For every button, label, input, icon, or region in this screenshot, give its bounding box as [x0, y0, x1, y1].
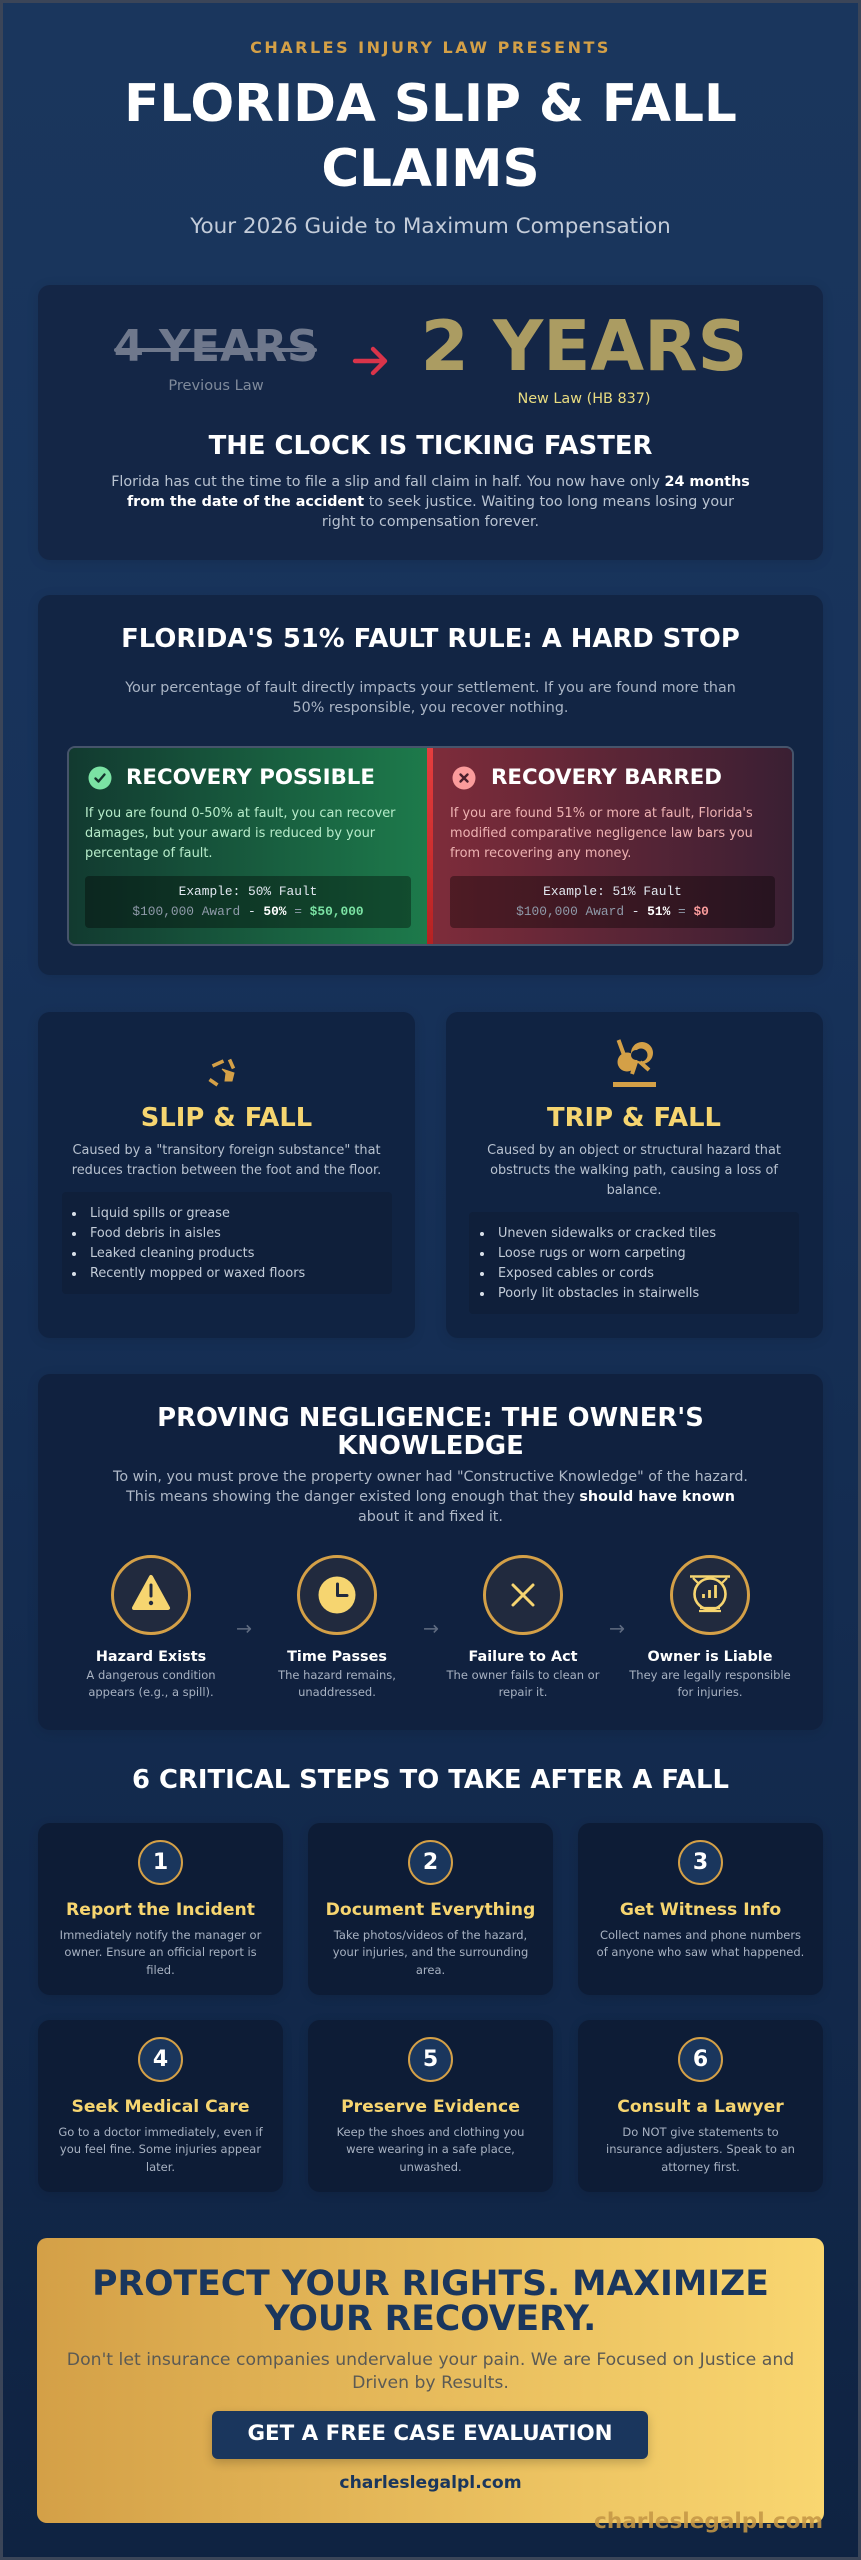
panel: slip and fall: [38, 1012, 415, 1338]
step card 5: [308, 2020, 553, 2192]
arrow: →: [236, 1617, 252, 1640]
description: [278, 1668, 396, 1699]
list items: Exposed cables or cords: [498, 1266, 654, 1281]
number: 1: [153, 1850, 168, 1875]
description: The owner fails to clean or: [447, 1668, 599, 1682]
panel heading: THE CLOCK IS TICKING FASTER: [209, 431, 652, 461]
description: [86, 1668, 216, 1699]
description: They are legally responsible: [629, 1668, 791, 1682]
step circle: liable: [670, 1555, 750, 1635]
icon: slip pieces: [208, 1058, 236, 1086]
arrow: red: [352, 346, 388, 376]
step text: [337, 2125, 524, 2174]
step card 1: [38, 1823, 283, 1995]
trip text: obstructs the walking path, causing a loss of: [490, 1163, 778, 1178]
number: [408, 1840, 453, 1885]
example: 51% fault: [450, 876, 775, 928]
cta heading: YOUR RECOVERY.: [265, 2299, 596, 2339]
section heading: steps: 6 CRITICAL STEPS TO TAKE AFTER A FALL: [132, 1764, 729, 1794]
step text: insurance adjusters. Speak to an: [606, 2142, 795, 2156]
step card 4: [38, 2020, 283, 2192]
step text: unwashed.: [399, 2160, 462, 2174]
description: appears (e.g., a spill).: [88, 1685, 214, 1699]
panel: trip and fall: [446, 1012, 823, 1338]
description: A dangerous condition: [86, 1668, 216, 1682]
negligence text: [112, 1469, 748, 1525]
step card 3: [578, 1823, 823, 1995]
example: 51% fault: Example: 51% Fault: [543, 884, 682, 899]
header eyebrow: CHARLES INJURY LAW PRESENTS: [250, 38, 611, 57]
negligence heading: [157, 1403, 704, 1461]
panel text: [111, 474, 750, 530]
trip text: balance.: [607, 1183, 661, 1198]
recovery barred text: [450, 806, 753, 861]
title: CLAIMS: [321, 139, 540, 199]
cta heading: PROTECT YOUR RIGHTS. MAXIMIZE: [92, 2264, 769, 2304]
number: [678, 2037, 723, 2082]
description: for injuries.: [677, 1685, 743, 1699]
label: Hazard Exists: [96, 1649, 206, 1665]
negligence text: about it and fixed it.: [358, 1509, 503, 1525]
list items: Leaked cleaning products: [90, 1246, 254, 1261]
example: 50% fault: $100,000 Award - 50% = $50,000: [132, 904, 364, 919]
icon: check: [88, 766, 112, 790]
label: Time Passes: [287, 1649, 387, 1665]
recovery possible text: percentage of fault.: [85, 846, 212, 861]
step label: liable: [629, 1649, 791, 1699]
panel: deadline: [38, 285, 823, 560]
step text: Immediately notify the manager or: [60, 1928, 261, 1942]
step text: Collect names and phone numbers: [600, 1928, 801, 1942]
step text: [60, 1928, 262, 1977]
step text: Do NOT give statements to: [622, 2125, 779, 2139]
description: [446, 1668, 600, 1699]
step circle: failure: [483, 1555, 563, 1635]
arrow: →: [423, 1617, 439, 1640]
step text: your injuries, and the surrounding: [333, 1945, 528, 1959]
step text: later.: [146, 2160, 175, 2174]
cta text: Driven by Results.: [352, 2373, 509, 2393]
step text: Go to a doctor immediately, even if: [58, 2125, 263, 2139]
list items: Liquid spills or grease: [90, 1206, 230, 1221]
description: [629, 1668, 791, 1699]
slip text: reduces traction between the foot and the floor.: [72, 1163, 381, 1178]
fault rule text: Your percentage of fault directly impacts your settlement. If you are found more than: [125, 680, 736, 696]
fault rule text: 50% responsible, you recover nothing.: [293, 700, 568, 716]
step text: Keep the shoes and clothing you: [337, 2125, 524, 2139]
step title: Document Everything: [326, 1900, 535, 1920]
watermark: charleslegalpl.com: [594, 2509, 823, 2534]
slip heading: SLIP & FALL: [141, 1103, 312, 1133]
step title: Get Witness Info: [620, 1900, 781, 1920]
label: Failure to Act: [468, 1649, 578, 1665]
recovery possible heading: RECOVERY POSSIBLE: [126, 765, 375, 790]
step circle: time: [297, 1555, 377, 1635]
trip text: [487, 1143, 781, 1198]
icon: cross: [511, 1583, 535, 1607]
step label: time: [278, 1649, 396, 1699]
trip list: [469, 1212, 799, 1314]
fault rule text: [125, 680, 736, 716]
divider: [427, 748, 433, 944]
list items: [90, 1206, 305, 1281]
icon: x: [452, 766, 476, 790]
green side: [69, 748, 427, 944]
step text: [597, 1928, 804, 1959]
number: 2: [423, 1850, 438, 1875]
new law label: New Law (HB 837): [517, 391, 651, 407]
step text: of anyone who saw what happened.: [597, 1945, 804, 1959]
number: [138, 2037, 183, 2082]
panel text: from the date of the accident to seek justice. Waiting too long means losing your: [127, 494, 734, 510]
step text: owner. Ensure an official report is: [64, 1945, 257, 1959]
panel: call to action: [37, 2238, 824, 2523]
red side: [433, 748, 792, 944]
example: 50% fault: Example: 50% Fault: [179, 884, 317, 899]
label: Owner is Liable: [648, 1649, 772, 1665]
recovery possible text: damages, but your award is reduced by your: [85, 826, 375, 841]
description: unaddressed.: [298, 1685, 376, 1699]
step label: failure: [446, 1649, 600, 1699]
icon: warning: [132, 1574, 170, 1610]
cta heading: [92, 2264, 769, 2339]
step circle: hazard: [111, 1555, 191, 1635]
step card 6: [578, 2020, 823, 2192]
website: charleslegalpl.com: [339, 2473, 522, 2493]
fault rule heading: FLORIDA'S 51% FAULT RULE: A HARD STOP: [121, 624, 740, 654]
cta button: GET A FREE CASE EVALUATION: [247, 2421, 613, 2446]
negligence text: To win, you must prove the property owner had "Constructive Knowledge" of the hazard.: [113, 1469, 748, 1485]
recovery barred text: modified comparative negligence law bars you: [450, 826, 753, 841]
number: 6: [693, 2047, 708, 2072]
slip text: Caused by a "transitory foreign substance" that: [72, 1143, 381, 1158]
step text: area.: [416, 1963, 445, 1977]
old deadline 4 years: 4 YEARS: [114, 322, 318, 372]
icon: liable chart: [690, 1575, 730, 1612]
step title: Report the Incident: [66, 1900, 255, 1920]
panel text: Florida has cut the time to file a slip and fall claim in half. You now have only 24 months: [111, 474, 750, 490]
number: 3: [693, 1850, 708, 1875]
step text: filed.: [146, 1963, 175, 1977]
recovery barred heading: RECOVERY BARRED: [491, 765, 722, 790]
number: 4: [153, 2047, 168, 2072]
title: FLORIDA SLIP & FALL: [124, 74, 737, 134]
example: 50% fault: [85, 876, 411, 928]
cta text: [67, 2350, 794, 2393]
description: The hazard remains,: [278, 1668, 396, 1682]
slip list: [62, 1192, 392, 1294]
recovery possible text: If you are found 0-50% at fault, you can recover: [85, 806, 396, 821]
title: [124, 74, 737, 199]
list items: Recently mopped or waxed floors: [90, 1266, 305, 1281]
icon: trip figure: [613, 1039, 656, 1087]
step text: Take photos/videos of the hazard,: [334, 1928, 527, 1942]
list items: Poorly lit obstacles in stairwells: [498, 1286, 699, 1301]
cta text: Don't let insurance companies undervalue your pain. We are Focused on Justice and: [67, 2350, 794, 2370]
panel: negligence: [38, 1374, 823, 1730]
step title: Seek Medical Care: [71, 2097, 250, 2117]
icon: clock: [318, 1576, 356, 1614]
step text: were wearing in a safe place,: [346, 2142, 515, 2156]
recovery barred text: from recovering any money.: [450, 846, 631, 861]
number: [678, 1840, 723, 1885]
arrow: →: [609, 1617, 625, 1640]
step text: [606, 2125, 795, 2174]
number: 5: [423, 2047, 438, 2072]
subtitle: Your 2026 Guide to Maximum Compensation: [190, 214, 671, 238]
step text: [58, 2125, 263, 2174]
panel text: right to compensation forever.: [322, 514, 539, 530]
step text: attorney first.: [661, 2160, 740, 2174]
description: repair it.: [499, 1685, 547, 1699]
step text: you feel fine. Some injuries appear: [60, 2142, 261, 2156]
trip heading: TRIP & FALL: [547, 1103, 721, 1133]
slip text: [72, 1143, 381, 1178]
number: [138, 1840, 183, 1885]
list items: [498, 1226, 716, 1301]
step label: hazard: [86, 1649, 216, 1699]
negligence heading: PROVING NEGLIGENCE: THE OWNER'S: [157, 1403, 704, 1433]
panel: fault rule: [38, 595, 823, 975]
recovery barred text: If you are found 51% or more at fault, Florida's: [450, 806, 753, 821]
new deadline 2 years: 2 YEARS: [421, 307, 747, 387]
example: 51% fault: $100,000 Award - 51% = $0: [516, 904, 709, 919]
list items: Food debris in aisles: [90, 1226, 221, 1241]
previous law label: Previous Law: [168, 377, 264, 394]
trip text: Caused by an object or structural hazard that: [487, 1143, 781, 1158]
cta button: [212, 2411, 648, 2459]
comparison box: [67, 746, 794, 946]
recovery possible text: [85, 806, 396, 861]
negligence heading: KNOWLEDGE: [337, 1431, 524, 1461]
step title: Consult a Lawyer: [617, 2097, 784, 2117]
step text: [333, 1928, 528, 1977]
step card 2: [308, 1823, 553, 1995]
number: [408, 2037, 453, 2082]
step title: Preserve Evidence: [341, 2097, 520, 2117]
negligence text: This means showing the danger existed long enough that they should have known: [126, 1489, 735, 1505]
list items: Loose rugs or worn carpeting: [498, 1246, 686, 1261]
list items: Uneven sidewalks or cracked tiles: [498, 1226, 716, 1241]
